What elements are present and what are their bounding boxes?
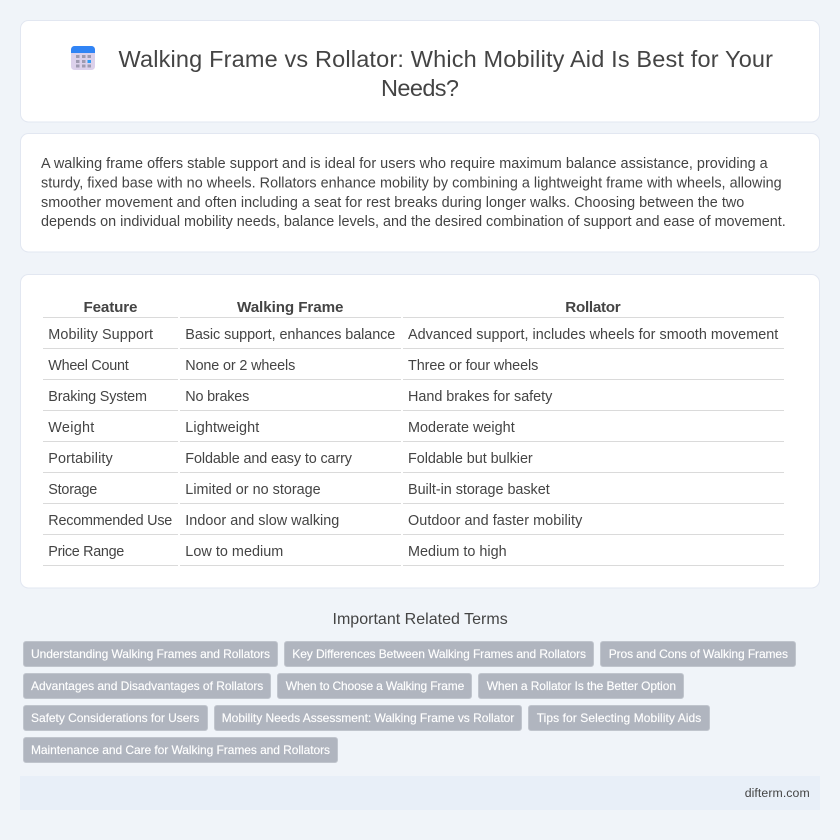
row: wheel count: Three or four wheels [408,358,538,374]
tag: Key Differences Between Walking Frames and Rollators [292,647,586,661]
intro paragraph: A walking frame offers stable support and is ideal for users who require maximum balance assistance, providing a [41,156,768,172]
heading: important related terms: Important Related Terms [332,611,508,628]
table header: Rollator [565,299,621,316]
row: recommended use [43,513,784,535]
row: price range: Medium to high [408,544,507,560]
row: weight: Lightweight [185,420,259,436]
row: storage [43,482,784,504]
icon: calendar [71,46,95,70]
row: recommended use: Indoor and slow walking [185,513,339,529]
intro paragraph: sturdy, fixed base with no wheels. Rollators enhance mobility by combining a lightweight frame with wheels, allowing [41,176,782,192]
row: storage: Built-in storage basket [408,482,550,498]
title: Needs? [381,75,459,101]
tag: Pros and Cons of Walking Frames [609,647,788,661]
row: portability [43,451,784,473]
tag [214,706,522,730]
tag: Safety Considerations for Users [31,711,199,725]
row: mobility support: Basic support, enhances balance [185,327,395,343]
tag: When a Rollator Is the Better Option [487,679,676,693]
row: braking system: Hand brakes for safety [408,389,553,405]
row: storage: Limited or no storage [185,482,321,498]
tag [600,642,796,666]
title: Walking Frame vs Rollator: Which Mobility Aid Is Best for Your [118,46,773,72]
row: weight: Weight [48,420,94,436]
intro paragraph [41,156,786,230]
row: weight [43,420,784,442]
tag: When to Choose a Walking Frame [286,679,465,693]
panel: comparison table [20,274,820,588]
tag [284,642,594,666]
row: mobility support [43,327,784,349]
tag [24,642,278,666]
tag [24,674,270,698]
tag [278,674,472,698]
row: portability: Foldable and easy to carry [185,451,353,467]
intro paragraph: smoother movement and often including a seat for rest breaks during longer walks. Choosing between the two [41,195,744,211]
row: portability: Portability [48,451,113,467]
intro paragraph: depends on individual mobility needs, balance levels, and the desired combination of support and ease of movement. [41,214,786,230]
row: braking system: Braking System [48,389,147,405]
tag [528,706,710,730]
panel: header [20,20,820,122]
row: price range [43,544,784,566]
tag [478,674,684,698]
row: mobility support: Advanced support, includes wheels for smooth movement [408,327,778,343]
tag: Understanding Walking Frames and Rollators [31,647,270,661]
table header: Walking Frame [237,299,344,316]
row: wheel count: None or 2 wheels [185,358,295,374]
row: wheel count: Wheel Count [48,358,129,374]
footer bar [20,776,820,810]
row: wheel count [43,358,784,380]
row: price range: Low to medium [185,544,283,560]
row: storage: Storage [48,482,97,498]
tag: Maintenance and Care for Walking Frames and Rollators [31,743,330,757]
row: mobility support: Mobility Support [48,327,153,343]
tag: Advantages and Disadvantages of Rollators [31,679,263,693]
row: price range: Price Range [48,544,124,560]
row: weight: Moderate weight [408,420,515,436]
row: braking system: No brakes [185,389,249,405]
row: recommended use: Outdoor and faster mobility [408,513,583,529]
title [118,46,773,101]
tag: Mobility Needs Assessment: Walking Frame vs Rollator [222,711,514,725]
row: recommended use: Recommended Use [48,513,172,529]
tag: Tips for Selecting Mobility Aids [537,711,701,725]
tag [24,706,208,730]
row: portability: Foldable but bulkier [408,451,533,467]
footer site name: difterm.com [745,786,810,800]
table header: Feature [84,299,138,316]
table header [43,299,784,318]
tag [24,738,338,762]
tag group: related terms [24,642,796,762]
panel: intro text [20,134,820,252]
row: braking system [43,389,784,411]
